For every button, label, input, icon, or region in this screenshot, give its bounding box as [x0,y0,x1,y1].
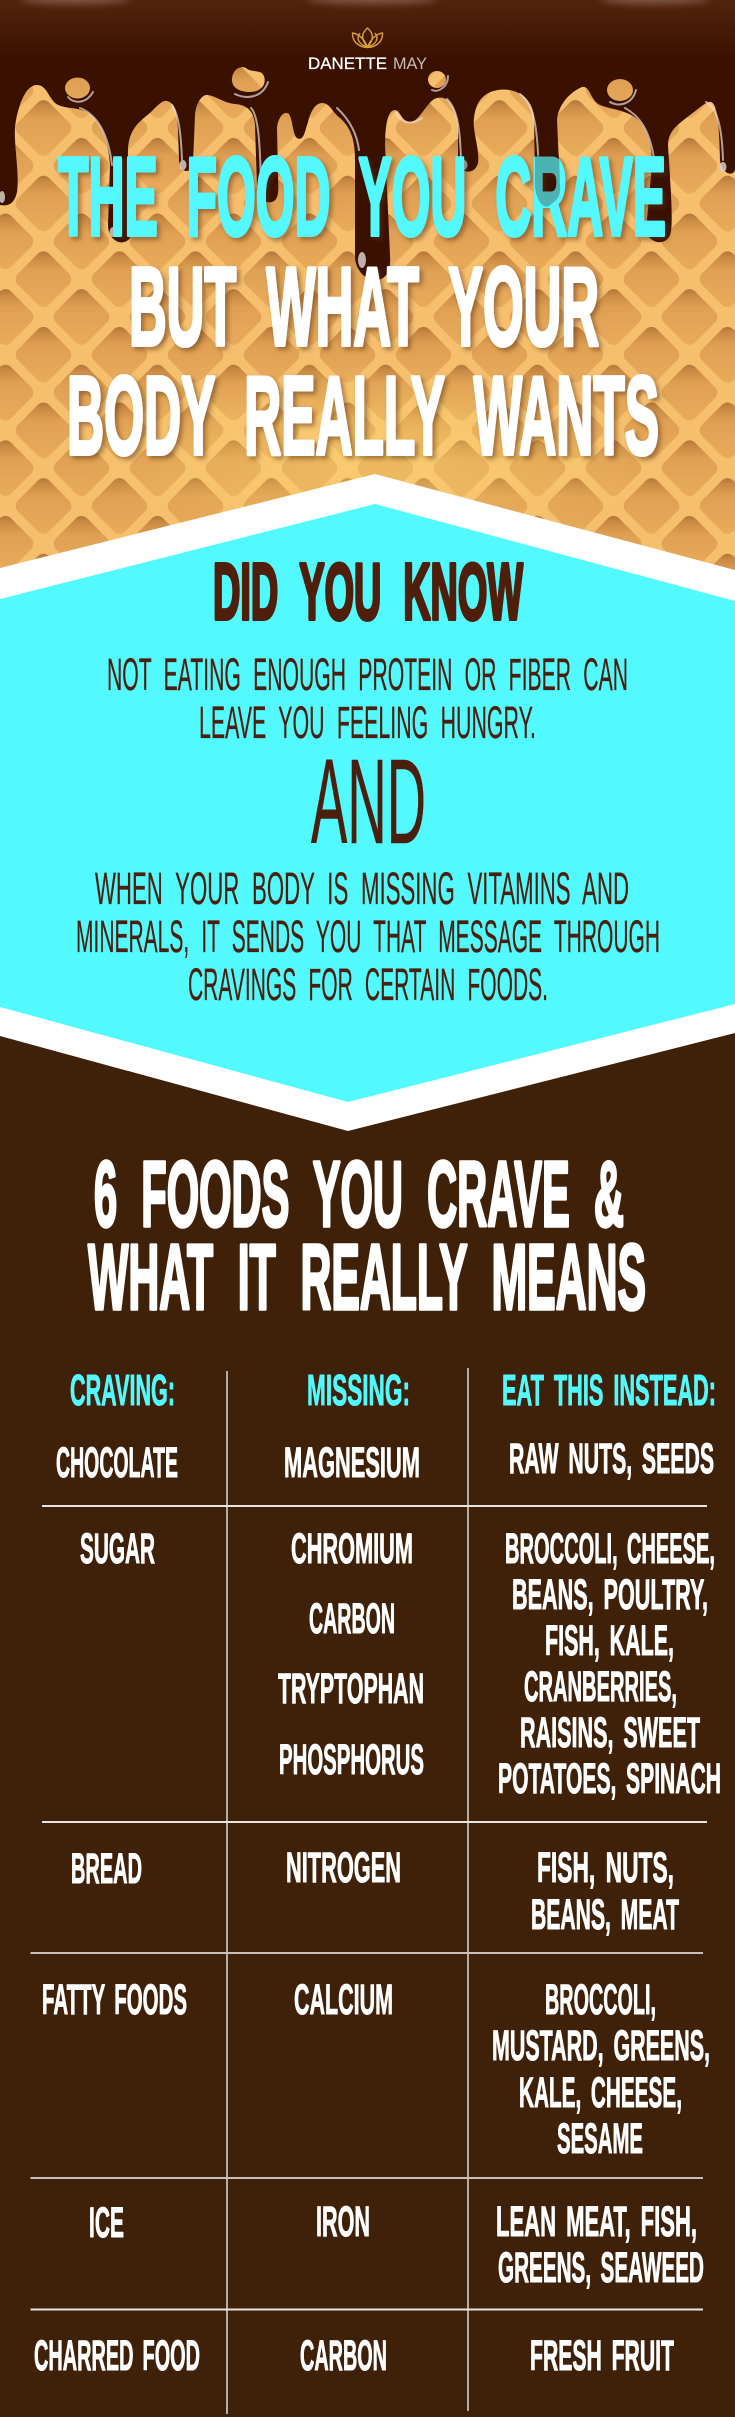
row: sugar: CARBON [309,1595,395,1643]
table header: CRAVING: [70,1366,175,1415]
row: bread: NITROGEN [286,1844,401,1892]
row: fatty foods [42,1976,710,2163]
logo: Danette May: MAY [393,54,427,73]
row: charred food: CHARRED FOOD [34,2332,200,2380]
heading: 6 foods [88,1142,646,1329]
row: charred food: CARBON [300,2332,387,2380]
row: sugar: SUGAR [80,1525,155,1573]
row: sugar: CHROMIUM [291,1525,413,1573]
row: fatty foods: CALCIUM [294,1976,393,2024]
logo wordmark: DANETTE [308,54,387,73]
brown lower background [0,1000,735,2417]
panel: did you know: AND [311,733,426,869]
waffle background [0,0,735,620]
drip overlapping title letter [535,155,560,207]
row: chocolate: CHOCOLATE [56,1439,178,1487]
white hexagon border [0,474,735,1131]
table [30,1366,721,2414]
row: charred food [34,2332,674,2380]
panel: did you know [0,504,735,1102]
row: sugar: PHOSPHORUS [279,1736,424,1784]
chocolate drips [0,0,735,280]
row: fatty foods: FATTY FOODS [42,1976,187,2024]
drip highlights [68,76,723,185]
text block: vitamins and minerals [76,863,660,1010]
row: ice: ICE [89,2199,124,2247]
logo: Danette May [308,28,427,73]
row: sugar [80,1525,721,1803]
row: ice: IRON [316,2198,370,2246]
row: ice [89,2198,704,2292]
table header [70,1366,716,1415]
top chocolate gloss [20,0,710,4]
text block: protein and fiber [107,649,628,748]
table header: MISSING: [307,1366,410,1415]
row: bread: BREAD [71,1845,142,1893]
row: fatty foods: SESAME [557,2115,643,2163]
row: chocolate [56,1435,714,1487]
title [58,135,666,478]
row: chocolate: MAGNESIUM [284,1439,420,1487]
row: sugar: TRYPTOPHAN [278,1665,424,1713]
icon: gold lotus [352,28,383,48]
chocolate top sheen [0,0,735,60]
table grid [30,1368,707,2414]
row: bread [71,1844,679,1939]
